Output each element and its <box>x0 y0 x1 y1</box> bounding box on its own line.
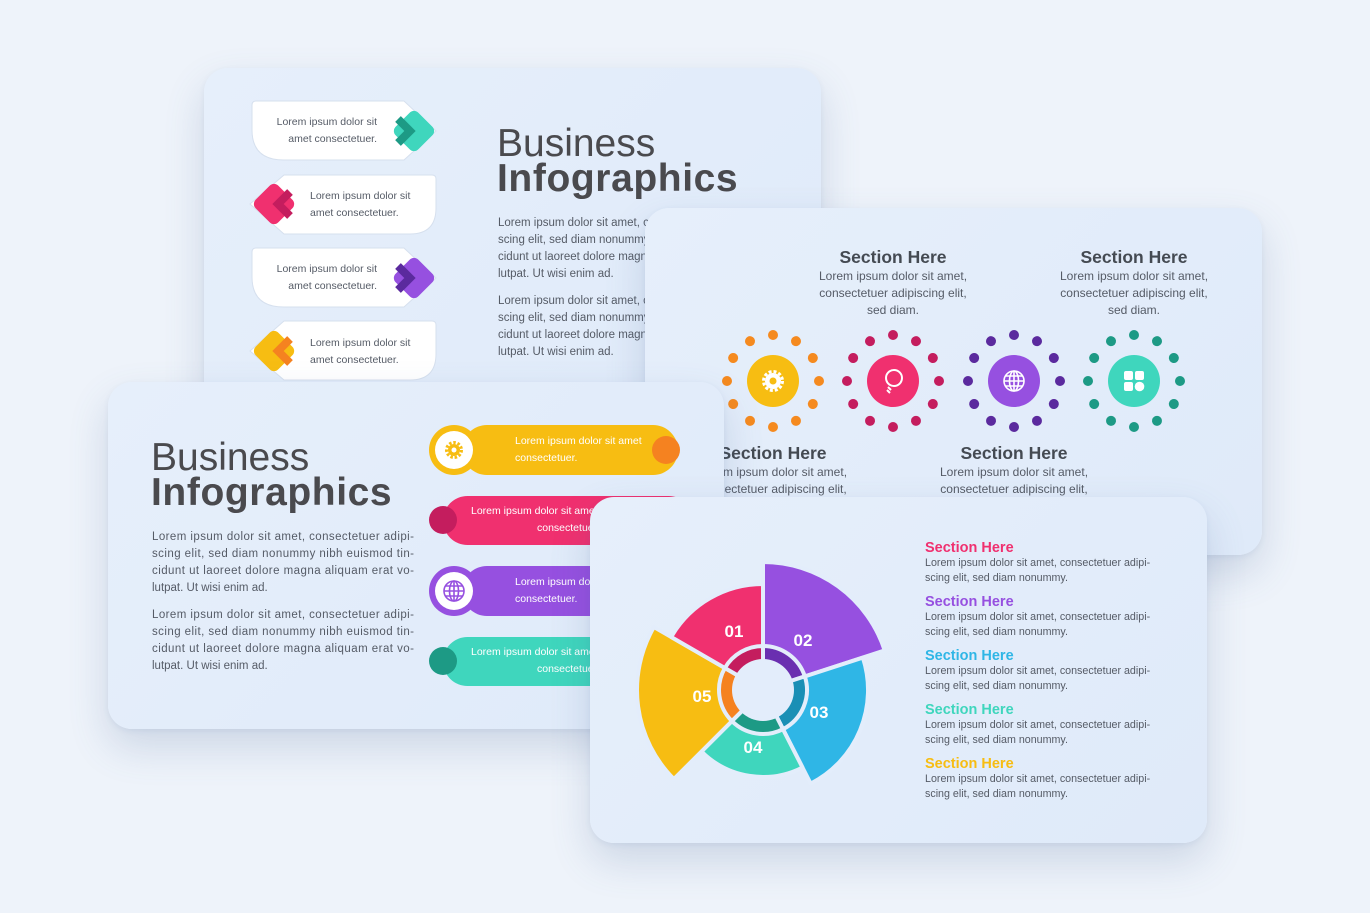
title <box>497 122 738 200</box>
text block <box>498 217 740 358</box>
section heading bottom 2: Lorem ipsum dolor sit amet, <box>940 465 1088 479</box>
section heading bottom 2: consectetuer adipiscing elit, <box>940 482 1088 496</box>
panel: top-left business infographics with tags <box>204 68 821 428</box>
legend item 2 <box>925 594 1151 638</box>
icon: grid dotted ring <box>1083 330 1185 432</box>
text block: lutpat. Ut wisi enim ad. <box>152 582 268 594</box>
section heading top 1: Section Here <box>840 247 947 267</box>
section heading top 2: consectetuer adipiscing elit, <box>1060 286 1208 300</box>
tag 3 purple: Lorem ipsum dolor sit <box>277 263 377 275</box>
icon: globe dotted ring <box>963 330 1065 432</box>
text block: lutpat. Ut wisi enim ad. <box>498 346 614 358</box>
pill 3 purple with globe: Lorem ipsum dolor sit amet <box>515 576 642 588</box>
tag 1 teal <box>252 101 437 160</box>
section heading top 1: consectetuer adipiscing elit, <box>819 286 967 300</box>
text block: Lorem ipsum dolor sit amet, consectetuer adipi- <box>152 531 414 543</box>
tag 2 pink: Lorem ipsum dolor sit <box>310 190 410 202</box>
section heading bottom 1: Section Here <box>720 443 827 463</box>
legend item 3: scing elit, sed diam nonummy. <box>925 680 1068 692</box>
tag 1 teal: amet consectetuer. <box>288 133 377 145</box>
pie chart: 04 <box>744 738 763 757</box>
legend item 1: Section Here <box>925 540 1014 556</box>
legend item 3: Section Here <box>925 648 1014 664</box>
title: Infographics <box>497 157 738 200</box>
text block: cidunt ut laoreet dolore magna aliquam erat vo- <box>498 329 739 341</box>
section heading bottom 2: Section Here <box>961 443 1068 463</box>
tag 1 teal: Lorem ipsum dolor sit <box>277 116 377 128</box>
title: Business <box>151 436 309 479</box>
text block: cidunt ut laoreet dolore magna aliquam erat vo- <box>498 251 739 263</box>
legend item 4: scing elit, sed diam nonummy. <box>925 734 1068 746</box>
legend item 2: scing elit, sed diam nonummy. <box>925 626 1068 638</box>
tag 3 purple <box>252 248 437 307</box>
text block: lutpat. Ut wisi enim ad. <box>498 268 614 280</box>
tag 2 pink <box>250 175 436 234</box>
legend item 5: scing elit, sed diam nonummy. <box>925 788 1068 800</box>
text block: scing elit, sed diam nonummy nibh euismod tin- <box>498 312 740 324</box>
pill 4 teal: Lorem ipsum dolor sit amet <box>471 646 598 658</box>
icon: gear dotted ring <box>722 330 824 432</box>
pie chart: 05 <box>693 687 711 706</box>
pill 3 purple with globe <box>429 566 678 616</box>
pill 2 pink: Lorem ipsum dolor sit amet <box>471 505 598 517</box>
tag 4 yellow: amet consectetuer. <box>310 354 399 366</box>
pill 2 pink: consectetuer. <box>537 522 599 534</box>
section heading bottom 1 <box>699 443 847 496</box>
legend item 5: Lorem ipsum dolor sit amet, consectetuer adipi- <box>925 773 1151 785</box>
section heading bottom 1: consectetuer adipiscing elit, <box>699 482 847 496</box>
legend item 5: Section Here <box>925 756 1014 772</box>
panel: pie chart with legend <box>590 497 1207 843</box>
legend item 2: Lorem ipsum dolor sit amet, consectetuer adipi- <box>925 611 1151 623</box>
legend item 3 <box>925 648 1151 692</box>
pill 3 purple with globe: consectetuer. <box>515 593 577 605</box>
legend item 1 <box>925 540 1151 584</box>
legend item 1: scing elit, sed diam nonummy. <box>925 572 1068 584</box>
panel: business infographics with pills <box>108 382 724 729</box>
text block: scing elit, sed diam nonummy nibh euismod tin- <box>498 234 740 246</box>
tag 4 yellow <box>250 321 436 380</box>
legend item 5 <box>925 756 1151 800</box>
text block: scing elit, sed diam nonummy nibh euismod tin- <box>152 548 414 560</box>
pill 1 yellow with gear <box>429 425 680 475</box>
legend item 1: Lorem ipsum dolor sit amet, consectetuer adipi- <box>925 557 1151 569</box>
pill 1 yellow with gear: consectetuer. <box>515 452 577 464</box>
title: Infographics <box>151 471 392 514</box>
section heading top 2: Section Here <box>1081 247 1188 267</box>
text block: cidunt ut laoreet dolore magna aliquam erat vo- <box>152 643 414 655</box>
pill 2 pink <box>429 496 693 545</box>
pill 4 teal <box>429 637 693 686</box>
text block: cidunt ut laoreet dolore magna aliquam erat vo- <box>152 565 414 577</box>
text block: lutpat. Ut wisi enim ad. <box>152 660 268 672</box>
title: Business <box>497 122 655 165</box>
pie chart: 03 <box>810 703 828 722</box>
legend item 4 <box>925 702 1151 746</box>
legend item 3: Lorem ipsum dolor sit amet, consectetuer adipi- <box>925 665 1151 677</box>
icon: bulb dotted ring <box>842 330 944 432</box>
tag 3 purple: amet consectetuer. <box>288 280 377 292</box>
panel: sections with dotted icons <box>645 208 1262 555</box>
pie chart <box>637 562 885 784</box>
text block: Lorem ipsum dolor sit amet, consectetuer adipi- <box>152 609 414 621</box>
pie chart: 01 <box>725 622 743 641</box>
tag 2 pink: amet consectetuer. <box>310 207 399 219</box>
legend item 4: Lorem ipsum dolor sit amet, consectetuer adipi- <box>925 719 1151 731</box>
section heading top 1: Lorem ipsum dolor sit amet, <box>819 269 967 283</box>
pill 1 yellow with gear: Lorem ipsum dolor sit amet <box>515 435 642 447</box>
tag 4 yellow: Lorem ipsum dolor sit <box>310 337 410 349</box>
section heading bottom 1: Lorem ipsum dolor sit amet, <box>699 465 847 479</box>
section heading top 1 <box>819 247 967 317</box>
text block <box>152 531 414 672</box>
section heading bottom 2 <box>940 443 1088 496</box>
pie chart: 02 <box>794 631 812 650</box>
section heading top 2: Lorem ipsum dolor sit amet, <box>1060 269 1208 283</box>
text block: Lorem ipsum dolor sit amet, consectetuer adipi- <box>498 217 740 229</box>
section heading top 2 <box>1060 247 1208 317</box>
pill 4 teal: consectetuer. <box>537 663 599 675</box>
legend item 2: Section Here <box>925 594 1014 610</box>
section heading top 2: sed diam. <box>1108 303 1160 317</box>
text block: Lorem ipsum dolor sit amet, consectetuer adipi- <box>498 295 740 307</box>
section heading top 1: sed diam. <box>867 303 919 317</box>
legend item 4: Section Here <box>925 702 1014 718</box>
title <box>151 436 392 514</box>
text block: scing elit, sed diam nonummy nibh euismod tin- <box>152 626 414 638</box>
